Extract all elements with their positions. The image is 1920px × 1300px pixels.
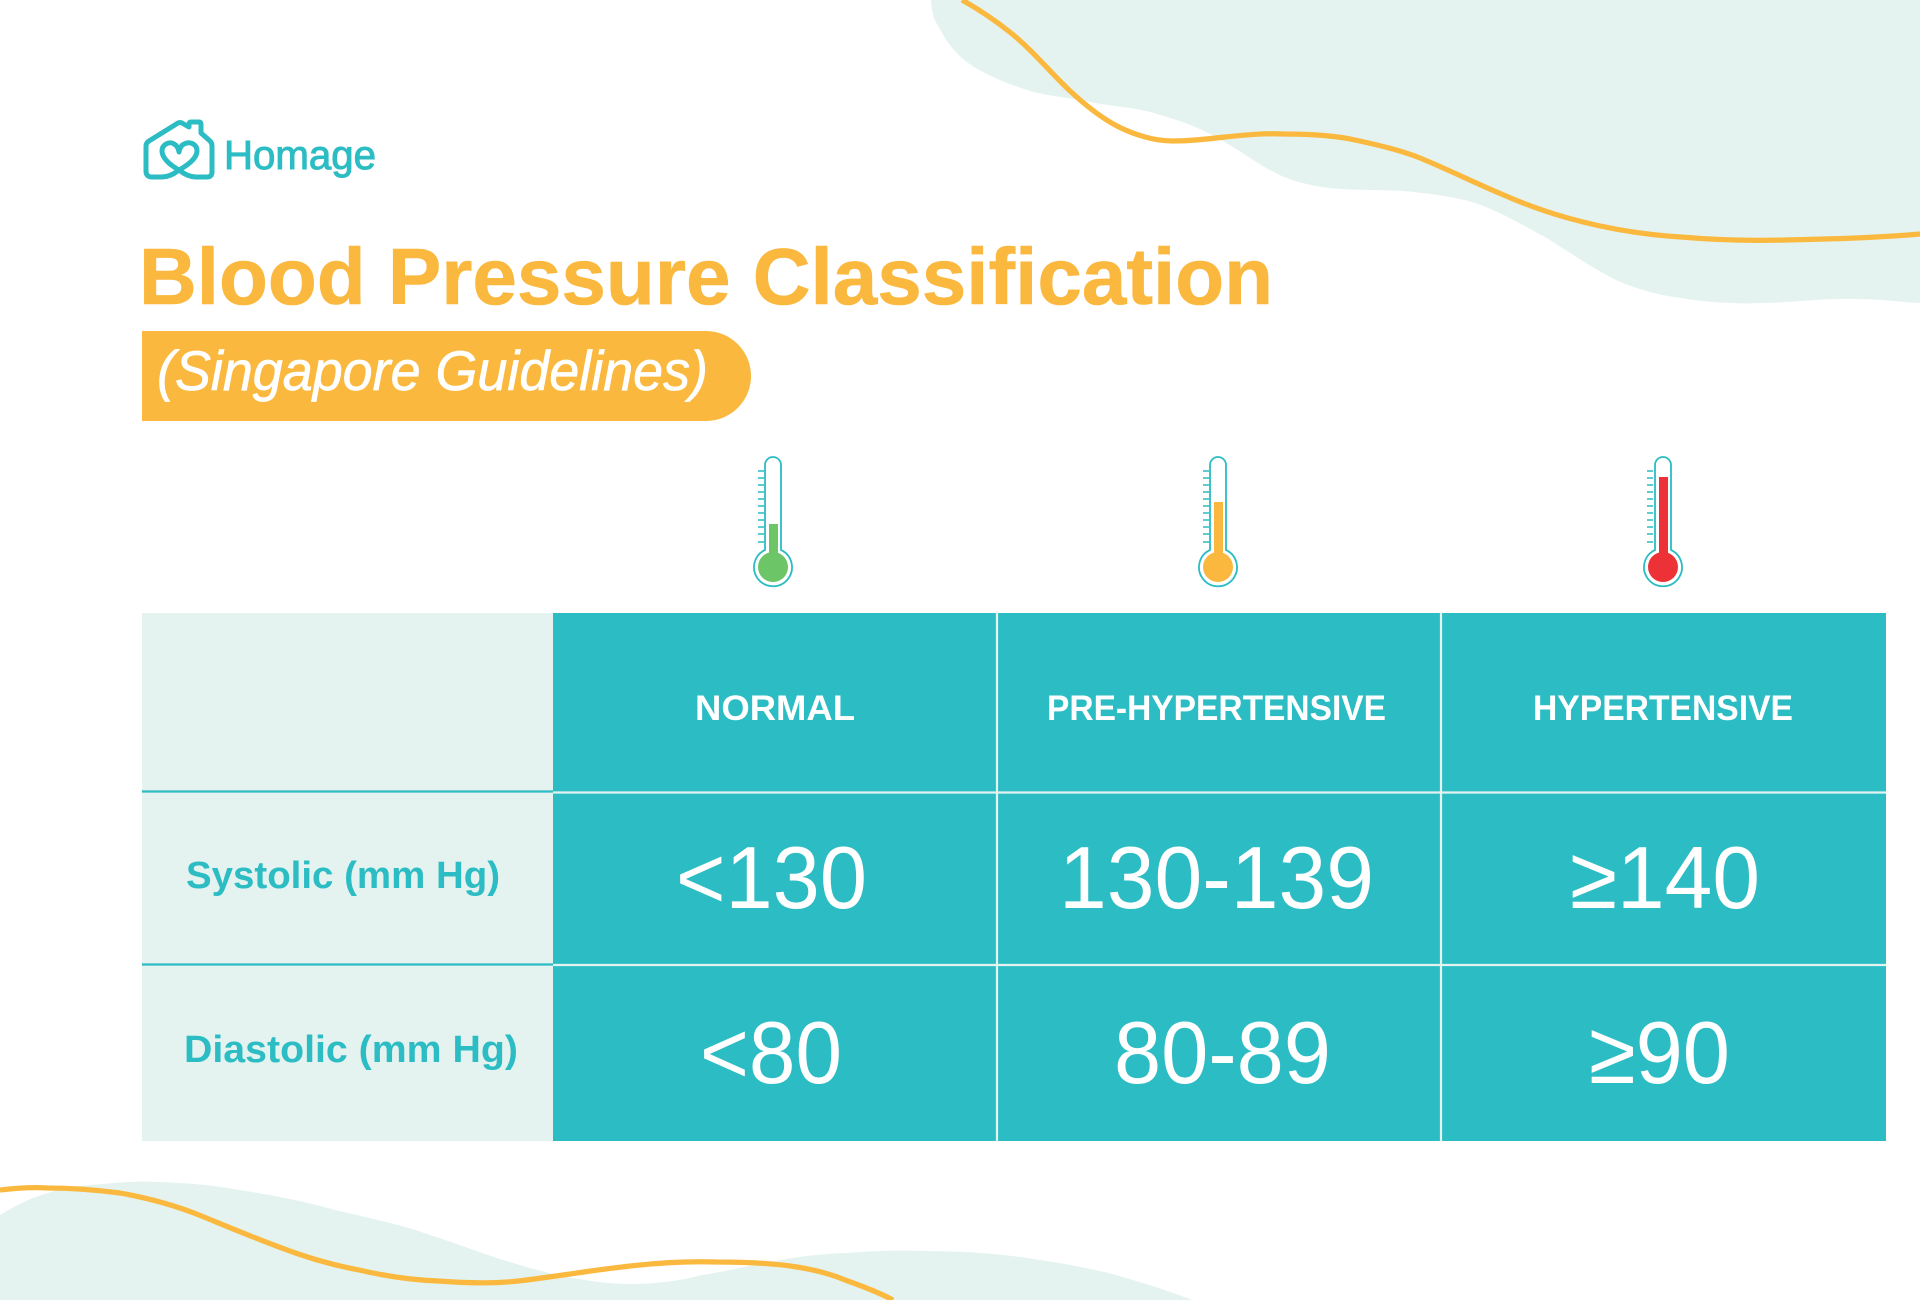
table	[142, 613, 1886, 1141]
table teal body	[553, 613, 1886, 1141]
table label column	[142, 613, 553, 1141]
icon: thermometer hypertensive	[1644, 457, 1682, 586]
decorative wave line: bottom left	[0, 1188, 893, 1300]
value: diastolic normal: <80	[700, 1003, 842, 1102]
row label: diastolic: Diastolic (mm Hg)	[184, 1029, 518, 1071]
decorative wave line: top right	[962, 0, 1920, 240]
icon: thermometer normal	[754, 457, 792, 586]
subtitle pill	[142, 331, 751, 421]
column heading: pre-hypertensive: PRE-HYPERTENSIVE	[1047, 689, 1386, 728]
icon: thermometer pre-hypertensive	[1199, 457, 1237, 586]
value: diastolic pre-hypertensive: 80-89	[1114, 1003, 1331, 1102]
title: Blood Pressure Classification	[139, 232, 1273, 321]
subtitle pill: (Singapore Guidelines)	[157, 339, 708, 402]
background blob: top right	[931, 0, 1920, 303]
value: systolic normal: <130	[676, 828, 867, 927]
icon: house with heart	[146, 122, 212, 177]
row label: systolic: Systolic (mm Hg)	[186, 855, 500, 897]
column heading: normal: NORMAL	[695, 689, 855, 728]
value: diastolic hypertensive: ≥90	[1589, 1003, 1730, 1102]
value: systolic pre-hypertensive: 130-139	[1059, 828, 1374, 927]
background blob: bottom left	[0, 1182, 1192, 1300]
logo: Homage	[146, 122, 376, 178]
column heading: hypertensive: HYPERTENSIVE	[1533, 689, 1793, 728]
value: systolic hypertensive: ≥140	[1570, 828, 1760, 927]
wordmark: Homage	[224, 132, 376, 178]
